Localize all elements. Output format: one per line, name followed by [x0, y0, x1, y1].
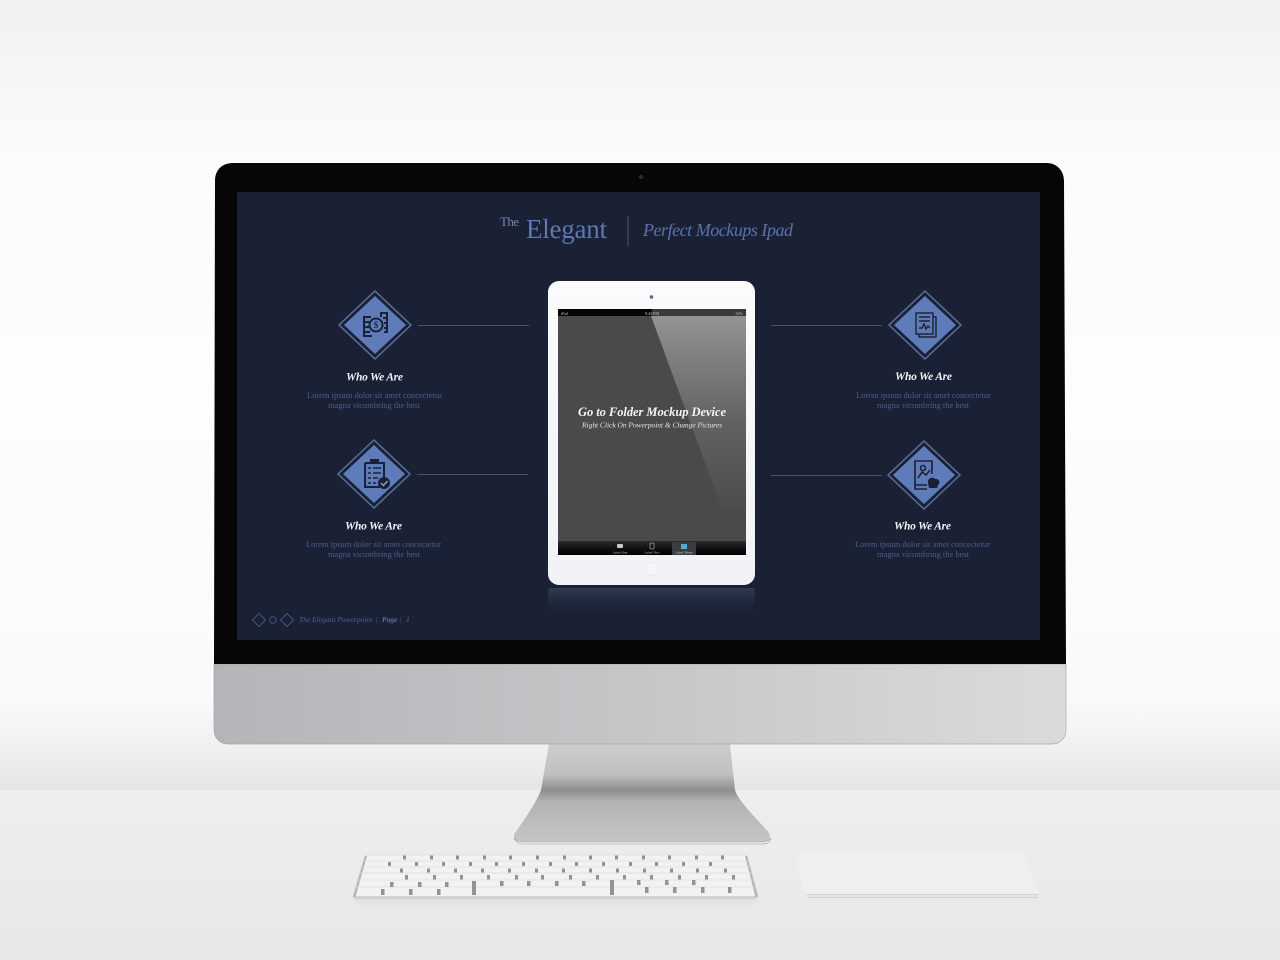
- description: Lorem ipsum dolor sit amet concectetur: [856, 390, 991, 400]
- description: Lorem ipsum dolor sit amet concectetur: [306, 539, 441, 549]
- keyboard body: [353, 855, 758, 899]
- connector line: bottom left: [417, 474, 528, 475]
- footer text: The Elegant Powerpoint: [299, 615, 373, 624]
- description: magna vicumbring the best: [328, 400, 421, 410]
- tablet home button: [646, 562, 658, 576]
- monitor: [214, 163, 1066, 744]
- camera: [639, 175, 643, 179]
- title: [500, 214, 794, 246]
- heading: Who We Are: [895, 371, 952, 383]
- icon: coins diamond: $: [374, 320, 379, 330]
- keyboard: [353, 855, 758, 901]
- monitor stand: [514, 744, 771, 844]
- status bar: 9:44 PM: [645, 311, 659, 316]
- dock bar: Label Two: [645, 550, 660, 554]
- connector line: top right: [771, 325, 882, 326]
- status bar: iPad: [561, 311, 568, 316]
- footer: 1: [406, 615, 410, 624]
- tablet screen: [558, 309, 746, 555]
- tablet: [548, 281, 755, 585]
- status bar: [558, 309, 746, 316]
- title: Perfect Mockups Ipad: [642, 220, 794, 240]
- description: magna vicumbring the best: [877, 549, 970, 559]
- connector line: top left: [418, 325, 529, 326]
- title: Elegant: [526, 214, 607, 244]
- title: The: [500, 214, 519, 229]
- item: bottom left: [306, 440, 441, 559]
- tablet body: [548, 281, 755, 585]
- monitor chin: [214, 664, 1066, 744]
- tablet camera: [650, 295, 653, 299]
- heading: Who We Are: [345, 520, 402, 532]
- item: top left: [307, 291, 442, 410]
- background: desk: [0, 790, 1280, 960]
- icon: tablet analytics diamond: [888, 441, 960, 509]
- tablet reflection: [548, 588, 755, 618]
- description: [306, 539, 441, 559]
- item: bottom right: [855, 441, 990, 559]
- icon: clipboard diamond: [338, 440, 410, 508]
- monitor bezel: [214, 163, 1066, 664]
- heading: Who We Are: [346, 372, 403, 384]
- icon: report diamond: [889, 291, 961, 359]
- tablet headline: Go to Folder Mockup Device: [578, 405, 726, 419]
- key rows: [381, 856, 735, 895]
- description: [855, 539, 990, 559]
- tablet subline: Right Click On Powerpoint & Change Pictures: [581, 420, 722, 430]
- footer shapes: [252, 614, 294, 626]
- footer: Page: [382, 615, 398, 624]
- keyboard shadow: [356, 897, 756, 901]
- description: magna vicumbring the best: [877, 400, 970, 410]
- connector line: bottom right: [771, 475, 882, 476]
- description: magna vicumbring the best: [328, 549, 421, 559]
- screen glare: [651, 316, 746, 509]
- dock bar: [558, 541, 746, 555]
- dock bar: Label One: [613, 550, 628, 554]
- footer: [252, 614, 410, 626]
- dock bar: Label Three: [676, 550, 693, 554]
- description: [856, 390, 991, 410]
- heading: Who We Are: [894, 520, 951, 532]
- footer: |: [376, 615, 378, 624]
- item: top right: [856, 291, 991, 410]
- description: Lorem ipsum dolor sit amet concectetur: [307, 390, 442, 400]
- description: Lorem ipsum dolor sit amet concectetur: [855, 539, 990, 549]
- description: [307, 390, 442, 410]
- footer: |: [400, 615, 402, 624]
- status bar: 62%: [736, 311, 744, 316]
- trackpad: [797, 853, 1038, 898]
- slide screen: [237, 192, 1040, 640]
